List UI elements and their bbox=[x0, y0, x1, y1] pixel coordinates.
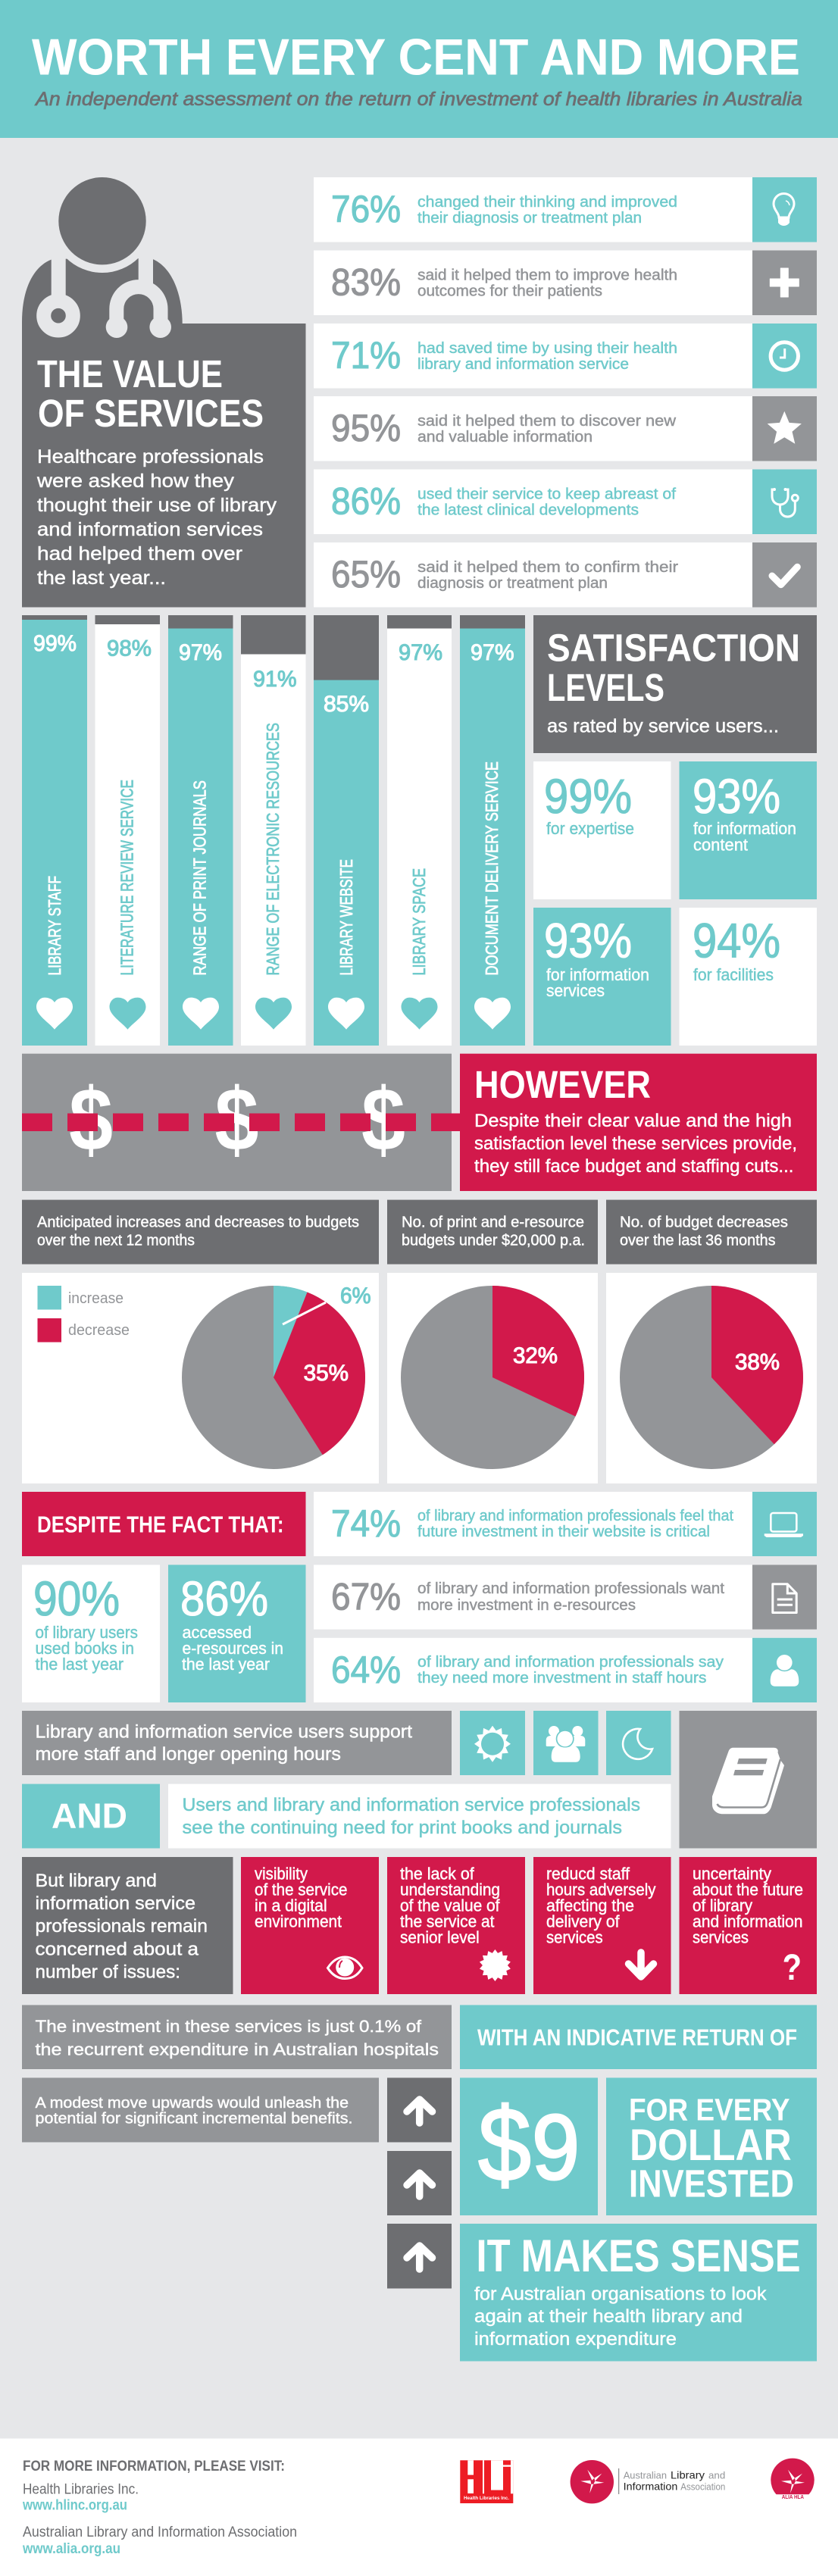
icon: plus bbox=[770, 268, 799, 297]
card: 86% accessed e-resources bbox=[168, 1565, 306, 1702]
stat row: 86%: 86% bbox=[331, 480, 401, 523]
icon tile: moon bbox=[606, 1711, 671, 1775]
panel: professionals concerned: concerned about a bbox=[35, 1940, 199, 1959]
footer links: www.hlinc.org.au bbox=[22, 2497, 127, 2514]
stat row: 65%: 65% bbox=[331, 553, 401, 596]
chart heading: print and e-resource budgets bbox=[387, 1200, 598, 1265]
chart heading: print and e-resource budgets: No. of print and e-resource bbox=[402, 1215, 584, 1231]
card: 94% for facilities bbox=[679, 908, 817, 1046]
card: visibility: in a digital bbox=[255, 1896, 327, 1915]
icon tile: up arrow 1 bbox=[387, 2077, 452, 2143]
logo: Australian Library and Information Association: Association bbox=[680, 2481, 725, 2493]
card: 86% accessed e-resources: 86% bbox=[180, 1571, 268, 1626]
stat row: 83%: 83% bbox=[331, 261, 401, 303]
chart: service satisfaction bars bbox=[22, 615, 525, 1046]
card: 94% for facilities: for facilities bbox=[693, 965, 774, 984]
icon tile: people bbox=[533, 1711, 599, 1775]
stat row: 76% bbox=[314, 177, 817, 242]
footer links: FOR MORE INFORMATION, PLEASE VISIT: bbox=[23, 2459, 285, 2474]
card: uncertainty: about the future bbox=[693, 1880, 803, 1899]
card: 99% for expertise: 99% bbox=[544, 769, 632, 824]
card: 86% accessed e-resources: accessed bbox=[182, 1623, 252, 1642]
panel: professionals concerned bbox=[22, 1857, 233, 1994]
stat row: 64%: they need more investment in staff hours bbox=[417, 1670, 706, 1687]
panel: nine dollars bbox=[460, 2077, 598, 2215]
stat row: 71%: 71% bbox=[331, 334, 401, 377]
stat row: 64%: of library and information professionals say bbox=[417, 1654, 724, 1671]
bar: range of electronic resources 91%: RANGE OF ELECTRONIC RESOURCES bbox=[263, 723, 283, 976]
panel: investment share: The investment in these services is just 0.1% of bbox=[35, 2017, 422, 2036]
stat row: 74%: future investment in their website is critical bbox=[417, 1524, 710, 1540]
card: 90% used books bbox=[22, 1565, 160, 1702]
chart heading: budget decreases: No. of budget decreases bbox=[620, 1215, 788, 1231]
stat row: 71%: had saved time by using their health bbox=[417, 340, 677, 357]
panel: for every dollar invested: DOLLAR bbox=[630, 2121, 792, 2170]
panel: professionals concerned: information service bbox=[35, 1893, 195, 1914]
legend: increase bbox=[68, 1290, 124, 1307]
logo: ALIA HLA: ALIA HLA bbox=[782, 2493, 804, 2500]
intro text: thought their use of library bbox=[37, 495, 277, 516]
footer links: Health Libraries Inc. bbox=[23, 2482, 139, 2498]
chart heading: budget decreases: over the last 36 months bbox=[620, 1233, 776, 1249]
logo: Australian Library and Information Association bbox=[571, 2460, 725, 2503]
pie chart: 32% bbox=[387, 1273, 598, 1483]
stat row: 67% bbox=[314, 1565, 817, 1630]
icon: check mark bbox=[772, 567, 797, 585]
stat row: 67%: more investment in e-resources bbox=[417, 1597, 636, 1614]
stat row: 86%: used their service to keep abreast of bbox=[417, 486, 676, 503]
panel: for every dollar invested: INVESTED bbox=[629, 2162, 794, 2206]
logo: HLI: Health Libraries Inc. bbox=[464, 2496, 509, 2501]
bar: document delivery service 97%: DOCUMENT DELIVERY SERVICE bbox=[482, 761, 502, 976]
icon: dollar signs: $ bbox=[361, 1070, 405, 1170]
bar: range of print journals 97% bbox=[168, 615, 233, 1046]
heading bbox=[37, 352, 264, 435]
card: reduced staff hours bbox=[533, 1857, 671, 1994]
footer links: www.alia.org.au bbox=[22, 2541, 120, 2557]
heading: OF SERVICES bbox=[38, 392, 264, 435]
stat row: 64%: 64% bbox=[331, 1649, 401, 1691]
stat row: 83% bbox=[314, 250, 817, 315]
bar: library space 97%: 97% bbox=[399, 640, 442, 665]
icon: star bbox=[768, 411, 802, 444]
panel: it makes sense: information expenditure bbox=[474, 2329, 677, 2349]
panel: however: Despite their clear value and the high bbox=[474, 1111, 792, 1131]
stat row: 83%: outcomes for their patients bbox=[417, 283, 602, 300]
chart heading: budget decreases bbox=[606, 1200, 817, 1265]
stat row: 67%: 67% bbox=[331, 1576, 401, 1618]
panel: print books and journals: Users and library and information service professionals bbox=[182, 1795, 640, 1815]
card: 93% for information services: 93% bbox=[544, 913, 632, 968]
pie chart: anticipated budgets bbox=[22, 1273, 379, 1483]
card: reduced staff hours: reducd staff bbox=[546, 1864, 630, 1884]
pie chart: 32%: 32% bbox=[513, 1343, 558, 1368]
bar: literature review service 98%: 98% bbox=[107, 636, 152, 661]
logo: HLI bbox=[460, 2460, 513, 2503]
card: 93% for information services: services bbox=[546, 981, 605, 1000]
card: uncertainty: of library bbox=[693, 1896, 752, 1915]
intro text: were asked how they bbox=[36, 470, 235, 492]
card: reduced staff hours: delivery of bbox=[546, 1912, 620, 1930]
card: reduced staff hours: hours adversely bbox=[546, 1880, 656, 1899]
card: 86% accessed e-resources: e-resources in bbox=[182, 1639, 283, 1658]
stat row: 65%: said it helped them to confirm their bbox=[417, 559, 678, 576]
panel: professionals concerned: But library and bbox=[35, 1871, 157, 1891]
bar: library website 85%: 85% bbox=[324, 692, 369, 717]
intro text: and information services bbox=[37, 519, 263, 540]
icon: clock bbox=[771, 342, 799, 370]
banner: despite the fact that bbox=[22, 1492, 306, 1556]
panel: staff and opening hours: more staff and longer opening hours bbox=[35, 1744, 341, 1765]
chart heading: anticipated budgets: over the next 12 months bbox=[37, 1233, 195, 1249]
card: 93% for information content bbox=[679, 761, 817, 899]
logo: ALIA HLA bbox=[771, 2459, 815, 2500]
stat row: 65%: diagnosis or treatment plan bbox=[417, 575, 608, 592]
panel: however bbox=[460, 1054, 817, 1191]
stat row: 71% bbox=[314, 324, 817, 388]
card: 90% used books: the last year bbox=[35, 1655, 124, 1674]
card: uncertainty bbox=[679, 1857, 817, 1994]
panel: print books and journals: see the continuing need for print books and journals bbox=[182, 1818, 622, 1838]
logo: Australian Library and Information Association: Information bbox=[624, 2481, 677, 2493]
card: 99% for expertise: for expertise bbox=[546, 819, 634, 838]
bar: literature review service 98% bbox=[95, 615, 160, 1046]
bar: library website 85%: LIBRARY WEBSITE bbox=[336, 859, 356, 976]
icon: dollar signs: $ bbox=[215, 1070, 259, 1170]
panel: satisfaction levels heading bbox=[533, 615, 817, 753]
panel: however: HOWEVER bbox=[474, 1063, 651, 1106]
card: lack of understanding: of the value of bbox=[400, 1896, 500, 1915]
icon tile: up arrow 3 bbox=[387, 2224, 452, 2288]
footer links bbox=[22, 2459, 297, 2557]
pie chart: anticipated budgets: 6% bbox=[340, 1283, 371, 1308]
card: 93% for information content: for information bbox=[693, 819, 796, 838]
stat row: 74%: of library and information professionals feel that bbox=[417, 1508, 733, 1524]
logo: Australian Library and Information Association: Australian bbox=[624, 2470, 667, 2481]
card: 93% for information services: for information bbox=[546, 965, 649, 984]
panel: nine dollars: $ bbox=[478, 2087, 531, 2203]
panel: it makes sense bbox=[460, 2224, 817, 2361]
stat row: 71%: library and information service bbox=[417, 356, 629, 373]
stat row: 76%: their diagnosis or treatment plan bbox=[417, 210, 642, 227]
panel: investment share bbox=[22, 2005, 452, 2069]
card: 99% for expertise bbox=[533, 761, 671, 899]
icon: book bbox=[712, 1748, 784, 1814]
panel: modest move upwards: A modest move upwards would unleash the bbox=[35, 2095, 349, 2112]
panel: for every dollar invested bbox=[606, 2077, 817, 2215]
banner: despite the fact that: DESPITE THE FACT THAT: bbox=[37, 1511, 283, 1538]
icon: down arrow bbox=[629, 1952, 653, 1977]
icon: dollar signs bbox=[69, 1070, 405, 1170]
card: visibility: visibility bbox=[255, 1864, 308, 1884]
stat row: 76%: 76% bbox=[331, 188, 401, 230]
footer links: Australian Library and Information Association bbox=[23, 2524, 297, 2540]
icon: light bulb bbox=[774, 194, 794, 226]
stat row: 65% bbox=[314, 542, 817, 608]
legend: decrease bbox=[68, 1322, 130, 1339]
panel: investment share: the recurrent expenditure in Australian hospitals bbox=[35, 2040, 439, 2059]
card: 94% for facilities: 94% bbox=[693, 913, 780, 968]
card: visibility: of the service bbox=[255, 1880, 347, 1899]
stat row: 67%: of library and information professionals want bbox=[417, 1580, 724, 1597]
pie chart: 38%: 38% bbox=[735, 1350, 780, 1374]
panel: print books and journals bbox=[168, 1784, 671, 1849]
logo: Australian Library and Information Association: and bbox=[708, 2470, 725, 2481]
bar: range of electronic resources 91% bbox=[241, 615, 306, 1046]
intro text: had helped them over bbox=[37, 543, 242, 564]
subtitle: An independent assessment on the return of investment of health libraries in Australia bbox=[34, 89, 802, 110]
panel: it makes sense: again at their health library and bbox=[474, 2306, 743, 2327]
panel: book icon bbox=[679, 1711, 817, 1849]
panel: professionals concerned: number of issues: bbox=[35, 1962, 180, 1982]
card: uncertainty: services bbox=[693, 1927, 749, 1947]
panel: it makes sense: for Australian organisations to look bbox=[474, 2284, 768, 2304]
card: 86% accessed e-resources: the last year bbox=[182, 1655, 270, 1674]
pie chart: anticipated budgets: 35% bbox=[304, 1361, 349, 1386]
bar: library staff 99% bbox=[22, 615, 87, 1046]
intro text bbox=[36, 446, 277, 589]
chart heading: anticipated budgets: Anticipated increases and decreases to budgets bbox=[37, 1215, 359, 1231]
panel: however: satisfaction level these services provide, bbox=[474, 1133, 797, 1154]
icon: burst bbox=[480, 1949, 511, 1981]
card: visibility: environment bbox=[255, 1912, 342, 1930]
bar: range of print journals 97%: 97% bbox=[179, 640, 222, 665]
stat row: 83%: said it helped them to improve health bbox=[417, 267, 677, 283]
heading: THE VALUE bbox=[37, 352, 223, 395]
card: lack of understanding: the service at bbox=[400, 1912, 494, 1930]
card: lack of understanding: understanding bbox=[400, 1880, 500, 1899]
card: visibility bbox=[241, 1857, 379, 1994]
card: 90% used books: 90% bbox=[33, 1571, 120, 1626]
panel: the value of services bbox=[22, 169, 306, 607]
icon: document bbox=[773, 1584, 796, 1612]
stat row: 76%: changed their thinking and improved bbox=[417, 194, 677, 211]
bar: document delivery service 97%: 97% bbox=[471, 640, 514, 665]
panel: and bbox=[22, 1784, 160, 1849]
stat row: 86% bbox=[314, 470, 817, 534]
icon tile: up arrow 2 bbox=[387, 2151, 452, 2215]
intro text: Healthcare professionals bbox=[37, 446, 264, 467]
panel: indicative return bbox=[460, 2005, 817, 2069]
chart heading: anticipated budgets bbox=[22, 1200, 379, 1265]
panel: however: they still face budget and staffing cuts... bbox=[474, 1156, 794, 1177]
icon: eye bbox=[327, 1957, 362, 1979]
card: lack of understanding bbox=[387, 1857, 525, 1994]
panel: staff and opening hours bbox=[22, 1711, 452, 1775]
footer bbox=[0, 2438, 838, 2576]
stat row: 95% bbox=[314, 396, 817, 461]
panel: satisfaction levels heading: as rated by service users... bbox=[547, 715, 779, 736]
bar: library staff 99%: LIBRARY STAFF bbox=[45, 876, 64, 976]
card: 93% for information content: 93% bbox=[693, 769, 780, 824]
panel: modest move upwards bbox=[22, 2077, 379, 2143]
icon: question mark: ? bbox=[783, 1948, 802, 1988]
stat row: 86%: the latest clinical developments bbox=[417, 502, 639, 518]
panel: for every dollar invested: FOR EVERY bbox=[629, 2093, 790, 2127]
bar: library space 97%: LIBRARY SPACE bbox=[409, 868, 429, 976]
icon: stethoscope bbox=[772, 488, 798, 517]
card: reduced staff hours: affecting the bbox=[546, 1896, 634, 1915]
icon: dollar signs: $ bbox=[69, 1070, 113, 1170]
card: 90% used books: used books in bbox=[35, 1639, 134, 1658]
chart heading: print and e-resource budgets: budgets under $20,000 p.a. bbox=[402, 1233, 585, 1249]
stat row: 74%: 74% bbox=[331, 1502, 401, 1545]
bar: library website 85% bbox=[314, 615, 379, 1046]
card: 93% for information content: content bbox=[693, 836, 748, 855]
stat row: 64% bbox=[314, 1638, 817, 1702]
panel: satisfaction levels heading: LEVELS bbox=[547, 666, 664, 709]
card: 90% used books: of library users bbox=[35, 1623, 138, 1642]
card: uncertainty: uncertainty bbox=[693, 1864, 771, 1884]
icon: person bbox=[771, 1655, 799, 1687]
pie chart: 38% bbox=[606, 1273, 817, 1483]
stat row: 95%: 95% bbox=[331, 407, 401, 449]
panel: and: AND bbox=[52, 1796, 127, 1836]
card: uncertainty: and information bbox=[693, 1912, 803, 1930]
panel: nine dollars: 9 bbox=[532, 2096, 580, 2199]
stat row: 95%: said it helped them to discover new bbox=[417, 413, 677, 430]
icon: doctor with stethoscope bbox=[22, 169, 306, 607]
card: lack of understanding: senior level bbox=[400, 1927, 480, 1947]
panel: modest move upwards: potential for significant incremental benefits. bbox=[35, 2111, 353, 2127]
bar: document delivery service 97% bbox=[460, 615, 525, 1046]
card: lack of understanding: the lack of bbox=[400, 1864, 475, 1884]
title: WORTH EVERY CENT AND MORE bbox=[32, 29, 800, 86]
header banner bbox=[0, 0, 838, 138]
card: 93% for information services bbox=[533, 908, 671, 1046]
panel: satisfaction levels heading: SATISFACTION bbox=[547, 627, 800, 670]
icon tile: sun bbox=[460, 1711, 525, 1775]
legend bbox=[38, 1286, 130, 1343]
card: reduced staff hours: services bbox=[546, 1927, 603, 1947]
panel: professionals concerned: professionals remain bbox=[35, 1916, 208, 1937]
stat row: 74% bbox=[314, 1492, 817, 1556]
stat row: 95%: and valuable information bbox=[417, 429, 593, 445]
intro text: the last year... bbox=[37, 567, 166, 589]
panel: dollar signs cut by dashed line bbox=[22, 1054, 460, 1191]
bar: library staff 99%: 99% bbox=[33, 631, 77, 656]
logo: Australian Library and Information Association: Library bbox=[671, 2469, 705, 2481]
icon: laptop bbox=[765, 1513, 803, 1537]
bar: library space 97% bbox=[387, 615, 452, 1046]
bar: range of print journals 97%: RANGE OF PRINT JOURNALS bbox=[190, 780, 210, 976]
panel: staff and opening hours: Library and information service users support bbox=[35, 1721, 412, 1743]
bar: range of electronic resources 91%: 91% bbox=[253, 667, 297, 692]
bar: literature review service 98%: LITERATURE REVIEW SERVICE bbox=[117, 780, 137, 976]
